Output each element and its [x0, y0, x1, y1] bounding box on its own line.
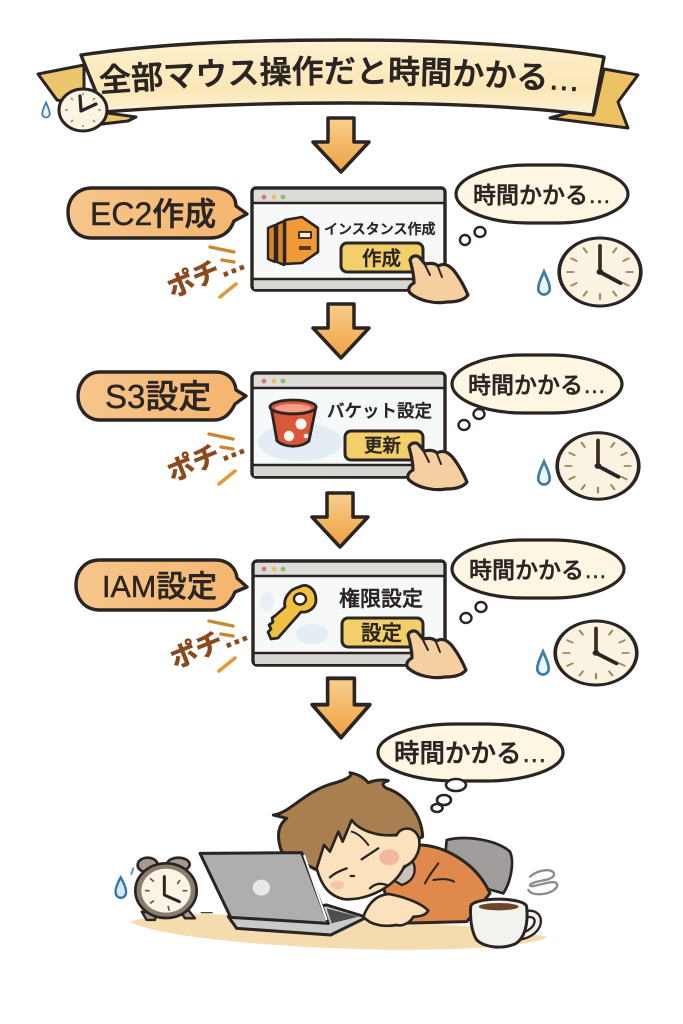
ribbon right tail — [550, 69, 638, 128]
final thought bubble — [378, 724, 563, 812]
button — [345, 431, 423, 460]
arrow 1 — [313, 118, 369, 172]
icon: sweat drop — [537, 652, 549, 674]
label bubble: IAM: IAM設定 — [102, 570, 217, 604]
window text: インスタンス作成 — [324, 221, 435, 237]
coffee cup — [471, 899, 538, 947]
laptop base — [228, 905, 367, 935]
label bubble: IAM — [76, 560, 247, 610]
chair — [443, 838, 512, 893]
hand on table — [363, 894, 428, 926]
row: EC2 — [68, 165, 641, 306]
button — [342, 618, 423, 647]
eyebrow — [352, 832, 368, 845]
click sound: ポチ… — [166, 616, 252, 675]
button: 更新 — [364, 435, 401, 456]
icon: hand — [407, 631, 466, 678]
arrow 4 — [312, 678, 370, 738]
alarm clock — [135, 858, 197, 920]
click sound: ポチ… — [163, 245, 249, 304]
icon: title sweat drop — [42, 102, 50, 118]
icon: hand — [409, 256, 468, 303]
arrow 2 — [313, 304, 369, 358]
icon: clock — [559, 238, 641, 306]
click sound: ポチ… — [163, 429, 249, 488]
window — [252, 188, 445, 290]
scene: exhausted person at laptop — [116, 773, 557, 950]
label bubble: EC2 — [68, 188, 247, 238]
thought bubble — [452, 355, 622, 430]
icon: title clock — [59, 89, 107, 131]
button — [341, 243, 423, 272]
closed eyes and mouth — [330, 848, 387, 888]
laptop lid — [200, 853, 328, 923]
icon: EC2 server — [268, 217, 318, 265]
title text: 全部マウス操作だと時間かかる… — [99, 56, 576, 94]
thought bubble: 時間かかる… — [469, 557, 607, 583]
arrow 3 — [312, 493, 368, 547]
thought bubble: 時間かかる… — [468, 372, 606, 398]
row: S3 — [78, 355, 639, 499]
window — [252, 373, 445, 477]
label bubble: EC2: EC2作成 — [90, 196, 216, 232]
button: 設定 — [361, 622, 402, 645]
hair — [273, 773, 423, 870]
thought bubble — [452, 540, 624, 623]
final thought bubble: 時間かかる… — [394, 740, 547, 768]
ear — [397, 829, 419, 867]
icon: S3 bucket — [270, 400, 316, 446]
ribbon left tail — [38, 65, 136, 124]
icon: hand — [408, 443, 467, 490]
label bubble: S3: S3設定 — [105, 378, 211, 415]
cheeks — [379, 849, 399, 865]
window — [253, 561, 445, 665]
collar — [393, 855, 415, 885]
label bubble: S3 — [78, 372, 246, 420]
table — [130, 914, 547, 950]
row: IAM — [76, 540, 637, 685]
title ribbon banner — [36, 38, 640, 132]
icon: clock — [555, 621, 637, 685]
sleeve folds — [425, 863, 454, 883]
icon: sweat drop — [538, 462, 550, 484]
icon: sweat drops — [116, 868, 133, 898]
ribbon main band — [81, 40, 604, 115]
table line — [201, 911, 213, 915]
face — [317, 820, 412, 899]
thought bubble: 時間かかる… — [473, 182, 611, 208]
button: 作成 — [362, 248, 401, 270]
window text: バケット設定 — [327, 401, 432, 421]
steam — [528, 870, 557, 894]
icon: sweat drop — [538, 272, 550, 294]
icon: clock — [557, 433, 639, 499]
icon: key — [268, 585, 316, 639]
thought bubble — [456, 165, 628, 245]
window text: 権限設定 — [339, 588, 423, 611]
body — [383, 845, 490, 923]
